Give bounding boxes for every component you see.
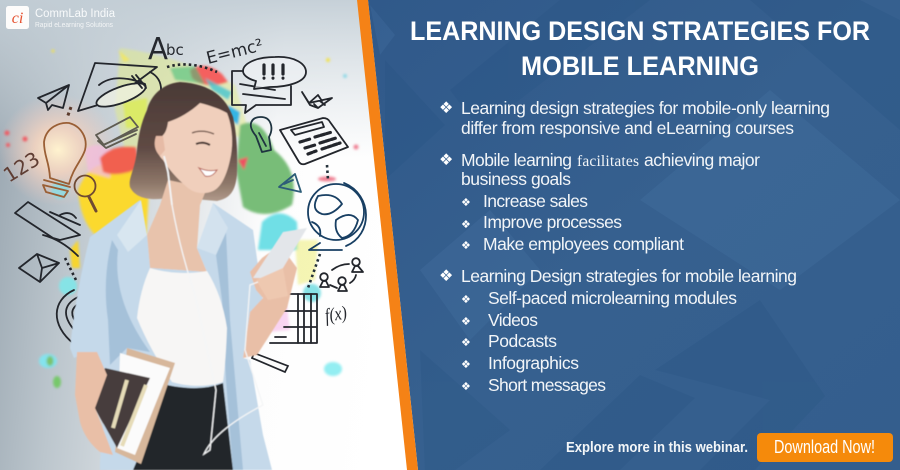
logo tagline: Rapid eLearning Solutions [35, 20, 113, 29]
paint splashes [4, 48, 358, 388]
title: MOBILE LEARNING [521, 51, 759, 81]
woman: paper [117, 353, 170, 455]
text block: third bullet: Podcasts [488, 331, 557, 351]
doodle: pencil [252, 353, 288, 372]
text block: third bullet: Videos [488, 310, 538, 330]
doodle: magnifier [74, 176, 96, 211]
text block: second bullet: ❖ [461, 196, 471, 209]
text block: second bullet: achieving major [644, 150, 760, 170]
panel: photo background [0, 0, 420, 470]
woman: smile [199, 168, 217, 176]
title [410, 16, 870, 81]
text block: second bullet [439, 150, 760, 254]
text block: third bullet: ❖ [461, 358, 471, 371]
doodles [0, 32, 366, 372]
woman: clipboard [115, 348, 175, 464]
photo: woman [70, 82, 307, 470]
logo name: CommLab India [35, 8, 116, 20]
text block: third bullet: ❖ [461, 380, 471, 393]
woman: jeans [133, 383, 233, 470]
doodle: people network [320, 258, 363, 291]
woman: shirt shading [106, 232, 243, 470]
background diamond pattern [370, 0, 900, 470]
doodle: E=mc2 formula: E=mc² [204, 35, 265, 69]
text block: second bullet: Improve processes [483, 212, 622, 232]
text block: second bullet: ❖ [461, 239, 471, 252]
logo: CommLab India [6, 6, 116, 29]
doodle: dotted connector [327, 165, 328, 180]
doodle: paper plane [38, 85, 69, 110]
woman: eye [196, 143, 210, 145]
text block: third bullet: Infographics [488, 353, 579, 373]
doodle: Abc text [148, 32, 184, 67]
logo glyph: ci [12, 10, 23, 27]
doodle: light bulb [43, 123, 86, 197]
text block: second bullet: ❖ [439, 150, 453, 169]
doodle: dotted arc [167, 64, 217, 72]
button: Download Now: Download Now! [774, 437, 875, 457]
text block: third bullet: Learning Design strategies for mobile learning [461, 266, 797, 286]
text block: third bullet [439, 266, 797, 395]
woman: face [156, 103, 232, 193]
doodle: money stack [96, 117, 138, 148]
text block: third bullet: Short messages [488, 375, 606, 395]
text block: second bullet: ❖ [461, 218, 471, 231]
text block: third bullet: ❖ [461, 293, 471, 306]
woman: phone [253, 228, 307, 278]
doodle: calculator [280, 118, 348, 164]
woman: left collar [117, 200, 147, 252]
orange slanted stripe [357, 0, 418, 470]
woman: notebooks [93, 368, 150, 448]
panel: blue background [368, 0, 900, 470]
doodle: dots [67, 107, 71, 118]
doodle: dotted connector lower [308, 254, 320, 288]
doodle: Abc text: A [148, 32, 168, 67]
text block: second bullet: Make employees compliant [483, 234, 684, 254]
text block: first bullet: ❖ [439, 98, 453, 117]
woman: ear [155, 136, 165, 156]
doodle: dotted left [65, 258, 77, 282]
doodle: books stack [270, 294, 317, 343]
woman: white top [137, 268, 227, 386]
title: LEARNING DESIGN STRATEGIES FOR [410, 16, 870, 46]
doodle: speech bubbles [232, 57, 306, 113]
woman: hair back [130, 82, 237, 201]
woman: eye brow [192, 131, 214, 134]
doodle: paper boat [302, 92, 332, 108]
woman: neck and chest [147, 180, 207, 272]
doodle: graduation cap [78, 63, 161, 111]
woman: earbud cable top [164, 156, 172, 205]
woman: hand and forearm [75, 352, 113, 455]
text block: third bullet: Self-paced microlearning modules [488, 288, 737, 308]
text block: third bullet: ❖ [461, 336, 471, 349]
doodle: Abc text: bc [166, 41, 184, 59]
text block: second bullet: Mobile learning [461, 150, 572, 170]
woman: earphone cable [172, 205, 263, 454]
doodle: 1 2 3: 123 [0, 147, 44, 187]
logo badge [6, 6, 29, 29]
text block: first bullet: differ from responsive and eLearning courses [461, 118, 794, 138]
doodle: f(x): f(x) [323, 302, 349, 327]
doodle: concentric arcs [57, 290, 80, 344]
text block: first bullet: Learning design strategies for mobile-only learning [461, 98, 830, 118]
woman: right collar [197, 203, 228, 255]
text block: third bullet: ❖ [461, 315, 471, 328]
text block: second bullet: business goals [461, 169, 571, 189]
text block: second bullet: facilitates [577, 153, 639, 170]
woman: shirt [70, 200, 272, 470]
text block: second bullet: Increase sales [483, 191, 588, 211]
text block: third bullet: ❖ [439, 266, 453, 285]
woman: raised arm [243, 245, 297, 358]
doodle: lightbulb small [251, 117, 271, 152]
doodle: globe [308, 183, 366, 250]
woman: notebook straps [113, 380, 146, 446]
text block: first bullet [439, 98, 830, 138]
woman: fingers [256, 268, 288, 300]
doodle: cube [19, 254, 59, 282]
doodle: diploma [15, 202, 80, 256]
doodle: envelope [279, 174, 301, 192]
call to action text: Explore more in this webinar. [566, 439, 748, 456]
button: Download Now [757, 433, 893, 462]
